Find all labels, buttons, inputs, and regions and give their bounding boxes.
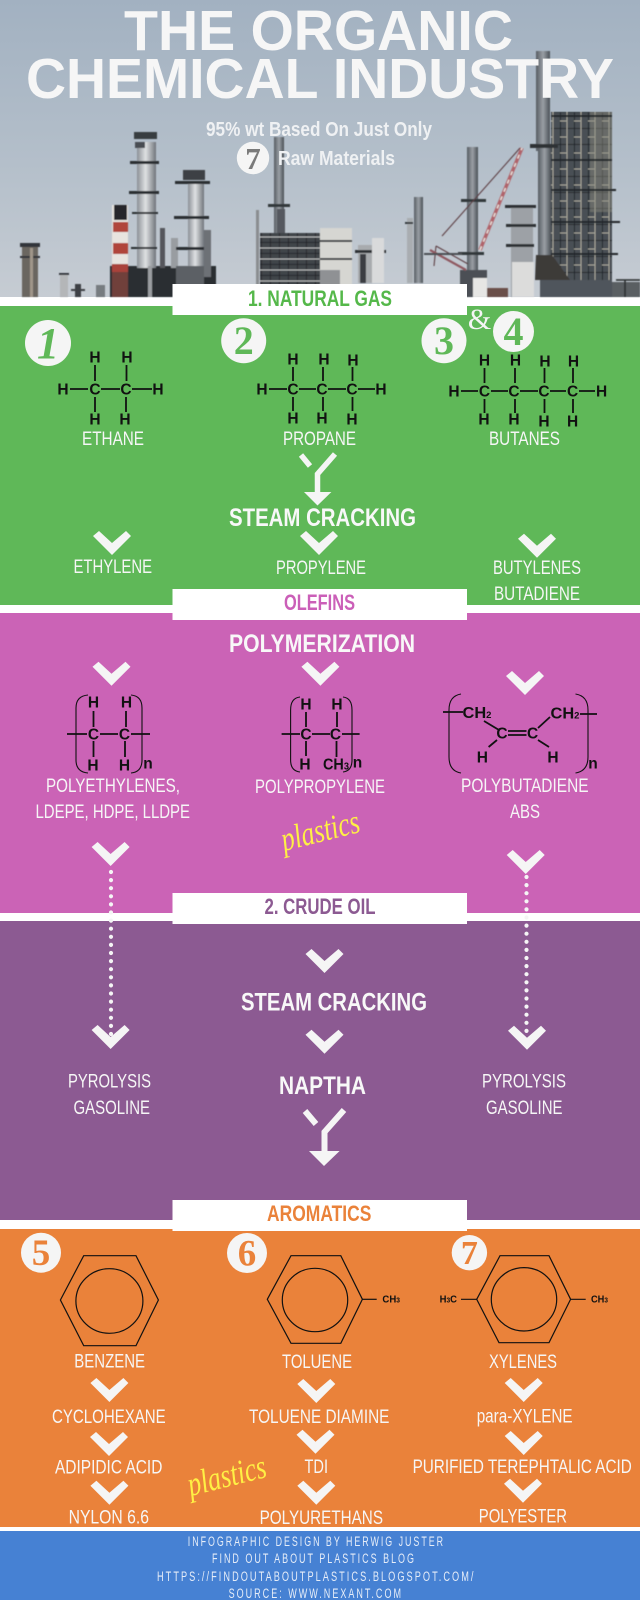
propane structure: H <box>347 352 359 370</box>
label: polyethylenes: POLYETHYLENES, <box>46 776 180 797</box>
ethane structure: C <box>89 382 101 398</box>
icon: number 5: 5 <box>32 1233 50 1274</box>
refinery photo <box>0 0 640 297</box>
heading: steam cracking: STEAM CRACKING <box>229 504 416 532</box>
ethane structure: C <box>120 382 132 398</box>
butanes structure: H <box>479 352 490 370</box>
butanes structure: C <box>479 384 490 400</box>
section label: aromatics <box>172 1200 467 1231</box>
label: right pyrolysis gasoline: PYROLYSIS <box>482 1072 566 1093</box>
ethane structure: H <box>152 382 164 398</box>
polypropylene structure: H <box>331 696 343 714</box>
propane structure: H <box>375 382 387 398</box>
polybutadiene structure <box>443 694 598 773</box>
heading: steam cracking: STEAM CRACKING <box>241 989 427 1017</box>
propane structure: C <box>287 382 299 398</box>
butanes structure: H <box>567 414 578 430</box>
label: butylenes and butadiene: BUTYLENES <box>493 558 581 579</box>
ampersand: & <box>468 303 491 336</box>
label: propylene: PROPYLENE <box>276 558 366 579</box>
script label: plastics: plastics <box>182 1449 270 1504</box>
butanes structure: H <box>508 412 520 428</box>
label: polypropylene: POLYPROPYLENE <box>255 777 385 798</box>
section label: crude oil: 2. CRUDE OIL <box>264 894 376 919</box>
polybutadiene structure: CH2 <box>462 705 492 722</box>
section label: crude oil <box>172 893 467 924</box>
label: polyethylenes <box>36 776 190 823</box>
label: polybutadiene and ABS <box>461 776 589 823</box>
polypropylene structure: CH3 <box>323 756 349 774</box>
butanes structure: H <box>478 412 490 428</box>
butanes structure: H <box>538 414 550 430</box>
panel: natural gas <box>0 303 640 605</box>
toluene chain: TDI <box>304 1457 328 1478</box>
label: right pyrolysis gasoline: GASOLINE <box>486 1098 562 1119</box>
benzene chain <box>52 1378 166 1528</box>
polypropylene structure: C <box>330 726 341 744</box>
label: polyethylenes: LDEPE, HDPE, LLDPE <box>36 802 190 823</box>
icon: number 1: 1 <box>37 319 59 368</box>
arrow: to ethylene <box>93 531 131 555</box>
propane structure: H <box>256 382 268 398</box>
label: propane: PROPANE <box>283 429 356 450</box>
label: xylenes: XYLENES <box>489 1352 557 1373</box>
label: butylenes and butadiene: BUTADIENE <box>494 584 580 605</box>
xylene ring: CH3 <box>591 1295 608 1306</box>
polyethylene structure: H <box>119 758 130 774</box>
panel: crude oil <box>0 921 640 1220</box>
propane structure: H <box>316 410 328 428</box>
ethane structure: H <box>121 350 133 366</box>
ethane structure: H <box>119 412 131 428</box>
polyethylene structure: C <box>119 726 130 744</box>
benzene chain: CYCLOHEXANE <box>52 1407 166 1428</box>
icon: number 7 badge: 7 <box>245 141 261 176</box>
propane structure: C <box>316 382 328 398</box>
icon: number 1 <box>25 319 71 368</box>
panel: olefins <box>0 613 640 913</box>
subtitle <box>206 119 433 176</box>
butanes structure: H <box>539 354 551 370</box>
title <box>26 0 614 111</box>
label: left pyrolysis gasoline <box>68 1072 151 1119</box>
footer: credits <box>0 1531 640 1600</box>
polypropylene structure <box>282 696 362 774</box>
polypropylene structure: H <box>299 756 311 774</box>
benzene chain: NYLON 6.6 <box>69 1507 149 1528</box>
arrow: to right pyrolysis gasoline <box>508 1026 546 1050</box>
subtitle: 95% wt Based On Just Only <box>206 119 433 141</box>
right thin towers and crane <box>405 147 522 297</box>
toluene chain <box>249 1379 389 1529</box>
icon: number 7 <box>452 1235 487 1272</box>
icon: number 4: 4 <box>504 309 524 354</box>
polyethylene structure: n <box>143 756 153 772</box>
icon: number 2 <box>221 318 266 363</box>
polybutadiene structure: n <box>588 756 598 772</box>
polybutadiene structure: H <box>547 750 559 766</box>
arrow: right down <box>507 850 545 874</box>
arrow: dotted connector left <box>109 872 113 1036</box>
label: benzene: BENZENE <box>74 1352 145 1373</box>
left refinery towers <box>110 132 216 297</box>
ethane structure: H <box>89 412 101 428</box>
toluene chain: TOLUENE DIAMINE <box>249 1407 389 1428</box>
xylene chain <box>413 1378 632 1528</box>
label: right pyrolysis gasoline <box>482 1072 566 1119</box>
icon: number 5 <box>21 1233 61 1274</box>
polybutadiene structure: H <box>477 750 488 766</box>
arrow: merge into steam cracking <box>301 454 335 506</box>
icon: number 3: 3 <box>434 318 454 363</box>
panel: aromatics <box>0 1229 640 1529</box>
arrow: to polypropylene <box>301 662 339 686</box>
label: toluene: TOLUENE <box>282 1352 352 1373</box>
butanes structure: C <box>538 384 550 400</box>
footer: credits: FIND OUT ABOUT PLASTICS BLOG <box>212 1551 416 1566</box>
label: butylenes and butadiene <box>493 558 581 605</box>
propane structure: H <box>287 352 299 368</box>
icon: number 3 <box>422 318 466 363</box>
label: left pyrolysis gasoline: PYROLYSIS <box>68 1072 151 1093</box>
ethane structure <box>57 350 164 428</box>
icon: number 6: 6 <box>238 1234 256 1274</box>
icon: number 7: 7 <box>461 1235 478 1272</box>
label: polybutadiene and ABS: POLYBUTADIENE <box>461 776 589 797</box>
label: polybutadiene and ABS: ABS <box>510 802 540 823</box>
label: ethane: ETHANE <box>82 429 144 450</box>
propane structure: C <box>346 382 358 398</box>
section label: aromatics: AROMATICS <box>267 1201 371 1226</box>
xylene ring: H3C <box>440 1295 457 1306</box>
section label: olefins <box>172 589 467 620</box>
butanes structure: H <box>510 352 521 370</box>
subtitle: Raw Materials <box>278 148 395 170</box>
polyethylene structure: H <box>121 694 132 712</box>
polypropylene structure: n <box>353 754 362 772</box>
footer: credits: INFOGRAPHIC DESIGN BY HERWIG JUSTER <box>188 1534 445 1549</box>
title: THE ORGANIC <box>124 0 513 63</box>
label: left pyrolysis gasoline: GASOLINE <box>74 1098 150 1119</box>
left small units <box>20 243 105 297</box>
right tall stack and lattice unit <box>487 51 640 297</box>
arrow: merge into aromatics <box>305 1110 344 1166</box>
polybutadiene structure: C <box>496 726 508 742</box>
arrow: to left pyrolysis gasoline <box>92 1025 130 1049</box>
ethane structure: H <box>89 350 101 366</box>
benzene ring <box>60 1256 158 1346</box>
benzene chain: ADIPIDIC ACID <box>55 1457 162 1478</box>
polypropylene structure: H <box>300 696 312 714</box>
icon: number 4 <box>493 309 534 354</box>
butanes structure: H <box>568 354 579 370</box>
toluene ring: CH3 <box>382 1295 400 1306</box>
icon: number 2: 2 <box>234 318 254 363</box>
heading: polymerization: POLYMERIZATION <box>229 630 415 658</box>
script label: plastics: plastics <box>275 804 364 859</box>
icon: number 6 <box>227 1233 267 1274</box>
arrow: left down <box>92 842 130 866</box>
heading: naptha: NAPTHA <box>279 1072 366 1100</box>
label: butanes: BUTANES <box>489 429 560 450</box>
section label: natural gas: 1. NATURAL GAS <box>248 286 392 311</box>
butanes structure: C <box>508 384 520 400</box>
title: CHEMICAL INDUSTRY <box>26 48 614 111</box>
propane structure: H <box>287 410 299 428</box>
header: refinery photo with title <box>0 0 640 297</box>
arrow: to naptha <box>306 1030 344 1054</box>
polyethylene structure <box>67 694 153 774</box>
arrow: to butylenes <box>518 534 556 558</box>
butanes structure <box>448 352 607 430</box>
section label: olefins: OLEFINS <box>284 590 355 615</box>
centre flare and structure <box>256 137 386 285</box>
arrow: dotted connector right <box>524 877 529 1034</box>
icon: number 7 badge <box>237 141 269 176</box>
polyethylene structure: C <box>88 726 99 744</box>
polyethylene structure: H <box>88 694 99 712</box>
butanes structure: C <box>567 384 578 400</box>
polybutadiene structure: C <box>527 726 538 742</box>
xylene chain: POLYESTER <box>479 1507 567 1528</box>
arrow: to polybutadiene <box>506 671 544 695</box>
footer: credits: HTTPS://FINDOUTABOUTPLASTICS.BLOGSPOT.COM/ <box>157 1569 476 1584</box>
butanes structure: H <box>448 384 460 400</box>
butanes structure: H <box>596 384 607 400</box>
ethane structure: H <box>57 382 69 398</box>
polyethylene structure: H <box>87 758 99 774</box>
propane structure: H <box>346 412 358 428</box>
toluene ring <box>267 1256 400 1343</box>
polypropylene structure: C <box>300 726 312 744</box>
arrow: to polyethylene <box>92 662 130 686</box>
xylene chain: para-XYLENE <box>477 1406 573 1427</box>
arrow: to propylene <box>300 531 338 555</box>
arrow: to steam cracking <box>306 949 344 973</box>
polybutadiene structure: CH2 <box>550 706 580 722</box>
xylene ring <box>440 1256 608 1343</box>
label: ethylene: ETHYLENE <box>74 557 152 578</box>
propane structure: H <box>318 352 330 368</box>
toluene chain: POLYURETHANS <box>260 1508 383 1529</box>
section label: natural gas <box>172 284 467 315</box>
propane structure <box>256 352 387 428</box>
